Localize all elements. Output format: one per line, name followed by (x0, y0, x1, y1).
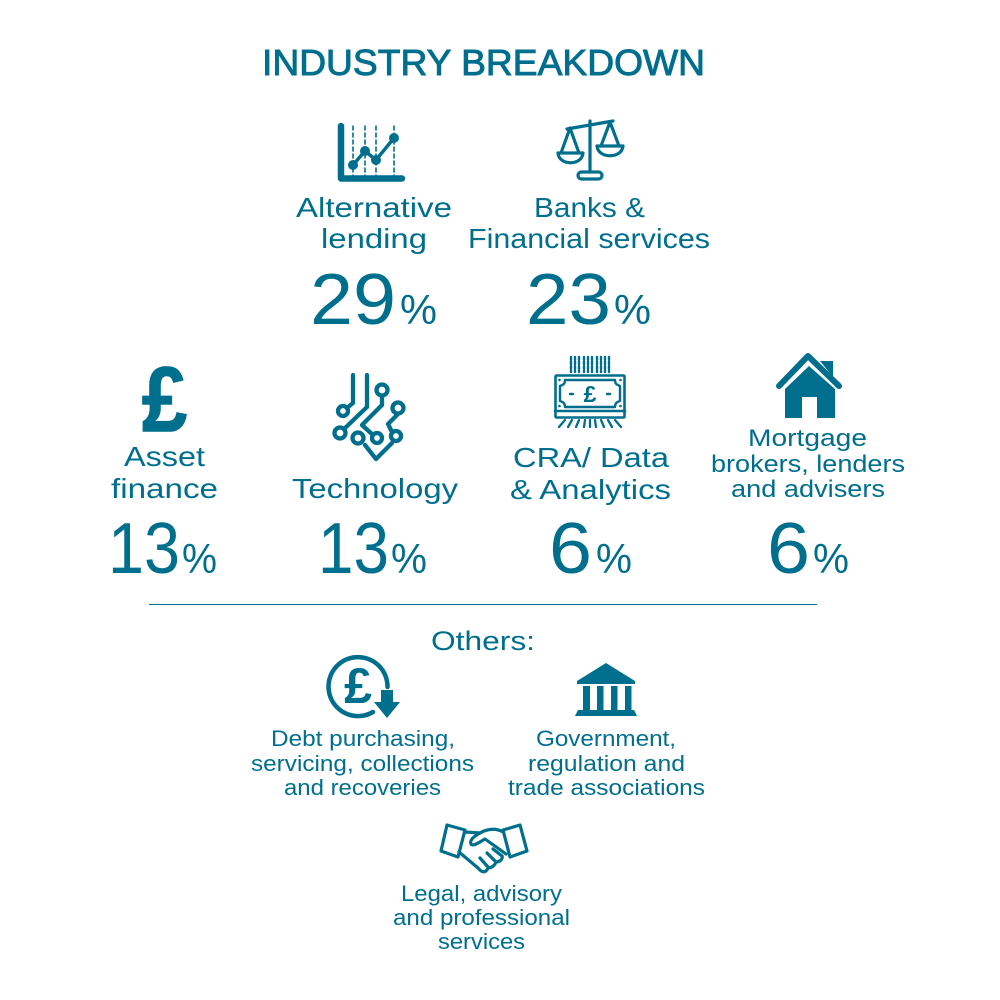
value: 6%: 6 (767, 509, 810, 589)
icon: line chart (341, 126, 402, 178)
label: debt purchasing: Debt purchasing, (271, 726, 455, 751)
label: asset finance: finance (111, 473, 218, 504)
panel: technology (292, 375, 458, 589)
label: mortgage brokers: and advisers (731, 476, 885, 503)
value: 13%: % (182, 535, 217, 582)
panel: CRA data and analytics (510, 357, 671, 589)
label: CRA data and analytics: CRA/ Data (513, 442, 669, 473)
label: government: Government, (536, 726, 676, 751)
icon: banknote chip: £ (584, 381, 597, 407)
icon: scales (558, 121, 623, 179)
panel: alternative lending (296, 126, 452, 340)
label: banks and financial services: Banks & (534, 192, 645, 223)
label: government: regulation and (528, 751, 685, 776)
icon: pound with down arrow (329, 657, 400, 718)
value: 13%: 13 (318, 509, 389, 589)
label: government: trade associations (508, 775, 705, 800)
label: alternative lending: Alternative (296, 192, 452, 223)
label: asset finance: Asset (124, 441, 205, 472)
label: legal and advisory: Legal, advisory (401, 881, 562, 906)
panel: banks and financial services (468, 121, 710, 340)
value: 6%: % (813, 535, 849, 582)
panel: mortgage brokers (711, 356, 905, 589)
icon: pound with down arrow: £ (344, 658, 372, 714)
label: debt purchasing: servicing, collections (251, 751, 474, 776)
label: debt purchasing: and recoveries (284, 775, 441, 800)
label: CRA data and analytics: & Analytics (510, 474, 671, 505)
icon: government building (575, 663, 637, 716)
value: 13%: 13 (108, 509, 180, 589)
panel: asset finance (108, 349, 218, 589)
label: mortgage brokers: brokers, lenders (711, 451, 905, 478)
icon: banknote chip (555, 357, 625, 427)
value: 6%: 6 (549, 509, 592, 589)
label: alternative lending: lending (321, 223, 427, 254)
value: 13%: % (391, 535, 427, 582)
icon: circuit (334, 375, 404, 459)
panel: debt purchasing (251, 657, 474, 800)
label: legal and advisory: and professional (393, 905, 570, 930)
icon: handshake (441, 825, 527, 872)
label: legal and advisory: services (438, 929, 525, 954)
label: mortgage brokers: Mortgage (748, 425, 867, 452)
title: INDUSTRY BREAKDOWN (262, 42, 705, 83)
label: banks and financial services: Financial services (468, 223, 710, 254)
panel: legal and advisory (393, 825, 570, 954)
value: 29%: 29 (310, 260, 396, 340)
label: technology: Technology (292, 473, 458, 504)
value: 29%: % (400, 286, 437, 333)
value: 23%: % (614, 286, 651, 333)
value: 6%: % (596, 535, 632, 582)
icon: pound sign: £ (142, 349, 187, 451)
value: 23%: 23 (526, 260, 611, 340)
panel: government (508, 663, 705, 800)
heading: others: Others: (431, 626, 535, 656)
icon: house (779, 356, 839, 418)
